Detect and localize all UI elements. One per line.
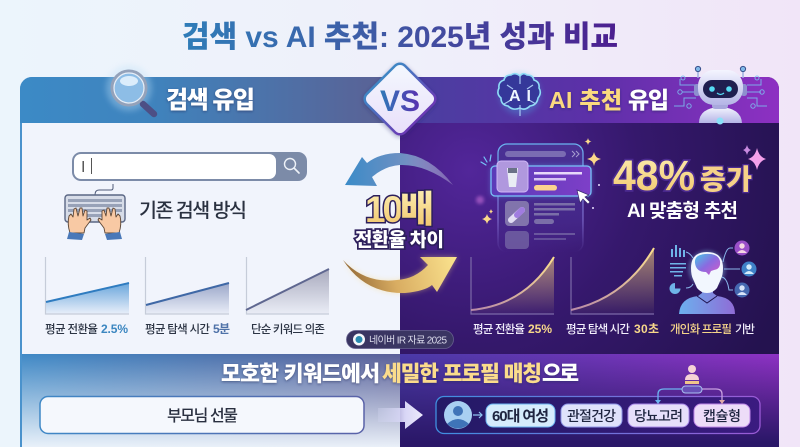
output box: profile attributes <box>436 396 760 434</box>
heading: search inflow: 검색 유입 <box>166 87 255 114</box>
chip: diabetes consideration: 당뇨고려 <box>634 408 683 424</box>
chip: capsule type: 캡슐형 <box>703 408 741 424</box>
callout: 10x conversion gap: 10배 <box>365 189 434 230</box>
label: personalized profile basis: 기반 <box>735 323 755 336</box>
icon: user avatar <box>444 401 482 429</box>
callout: 10x conversion gap: 전환율 차이 <box>355 229 444 251</box>
icon: personalized profile head <box>670 240 756 314</box>
band background right <box>400 354 779 447</box>
band background left <box>20 354 400 447</box>
chip: joint health <box>561 404 622 427</box>
text: AI personalized recommendation: AI 맞춤형 추천 <box>627 200 738 222</box>
heading: AI recommendation inflow: 유입 <box>628 87 669 113</box>
chart: search time 30 sec: 30초 <box>634 322 659 336</box>
panel: right AI recommendation inflow <box>400 66 779 447</box>
search bar <box>72 152 307 181</box>
chip: diabetes consideration <box>628 404 689 427</box>
heading: vague keyword to detailed profile matching: 세밀한 프로필 매칭 <box>382 362 542 386</box>
panel: left search inflow <box>20 65 400 447</box>
panel: bottom keyword to profile band <box>20 354 779 447</box>
stat: 48% increase: 증가 <box>700 164 752 195</box>
chart: conversion 2.5%: 평균 전환율 <box>45 323 98 336</box>
heading: vague keyword to detailed profile matching: 모호한 키워드에서 <box>221 362 380 386</box>
chip: female in her 60s: 60대 여성 <box>492 408 549 425</box>
label: personalized profile basis <box>670 322 755 336</box>
arrow: curved gold arrow to AI <box>343 257 457 293</box>
input box: gift for parents <box>40 396 364 434</box>
chart: search time 5 min: 평균 탐색 시간 <box>145 323 210 336</box>
heading: vague keyword to detailed profile matching: 으로 <box>542 362 579 386</box>
chart: conversion 2.5% <box>45 257 129 336</box>
left header band <box>20 77 400 123</box>
chart: simple keyword dependence: 단순 키워드 의존 <box>251 323 325 336</box>
icon: AI brain: AI <box>509 88 531 105</box>
search bar: I <box>81 159 85 176</box>
chart: simple keyword dependence <box>246 257 329 336</box>
chart: conversion 25% <box>471 257 554 336</box>
chart: search time 30 sec <box>566 248 659 336</box>
chart: conversion 2.5%: 2.5% <box>101 322 128 336</box>
arrow: input to profile <box>378 401 423 429</box>
stat: 48% increase: 48% <box>613 152 695 200</box>
title: 검색 vs AI 추천: 2025년 성과 비교 <box>182 21 618 54</box>
chart: search time 5 min <box>145 257 230 336</box>
icon: robot <box>674 66 767 124</box>
arrow: curved blue arrow back to search <box>345 153 453 186</box>
chart: conversion 25%: 평균 전환율 <box>473 323 525 336</box>
heading: vague keyword to detailed profile matching <box>221 362 579 386</box>
heading: AI recommendation inflow: AI 추천 <box>549 87 622 113</box>
chip: capsule type <box>694 404 750 427</box>
input box: gift for parents: 부모님 선물 <box>167 407 238 425</box>
icon: profile tree <box>655 365 725 404</box>
chip: female in her 60s <box>486 404 555 427</box>
chip: joint health: 관절건강 <box>567 408 616 424</box>
chart: conversion 25%: 25% <box>528 322 552 336</box>
icon: keyboard with hands <box>65 184 125 240</box>
source pill: 네이버 IR 자료 2025 <box>369 334 447 346</box>
text: existing search method: 기존 검색 방식 <box>139 200 247 222</box>
source pill <box>346 330 454 348</box>
VS badge: VS <box>380 85 420 118</box>
heading: AI recommendation inflow <box>549 87 669 113</box>
stat: 48% increase <box>613 145 766 200</box>
VS badge <box>362 61 438 137</box>
icon: AI brain <box>498 73 541 116</box>
icon: AI recommendation card list <box>476 138 601 252</box>
label: personalized profile basis: 개인화 프로필 <box>670 322 732 336</box>
chart: search time 30 sec: 평균 탐색 시간 <box>566 323 630 336</box>
icon: magnifying glass <box>106 65 154 114</box>
chart: search time 5 min: 5분 <box>213 322 230 336</box>
right header band <box>400 77 779 123</box>
callout: 10x conversion gap <box>355 189 444 251</box>
